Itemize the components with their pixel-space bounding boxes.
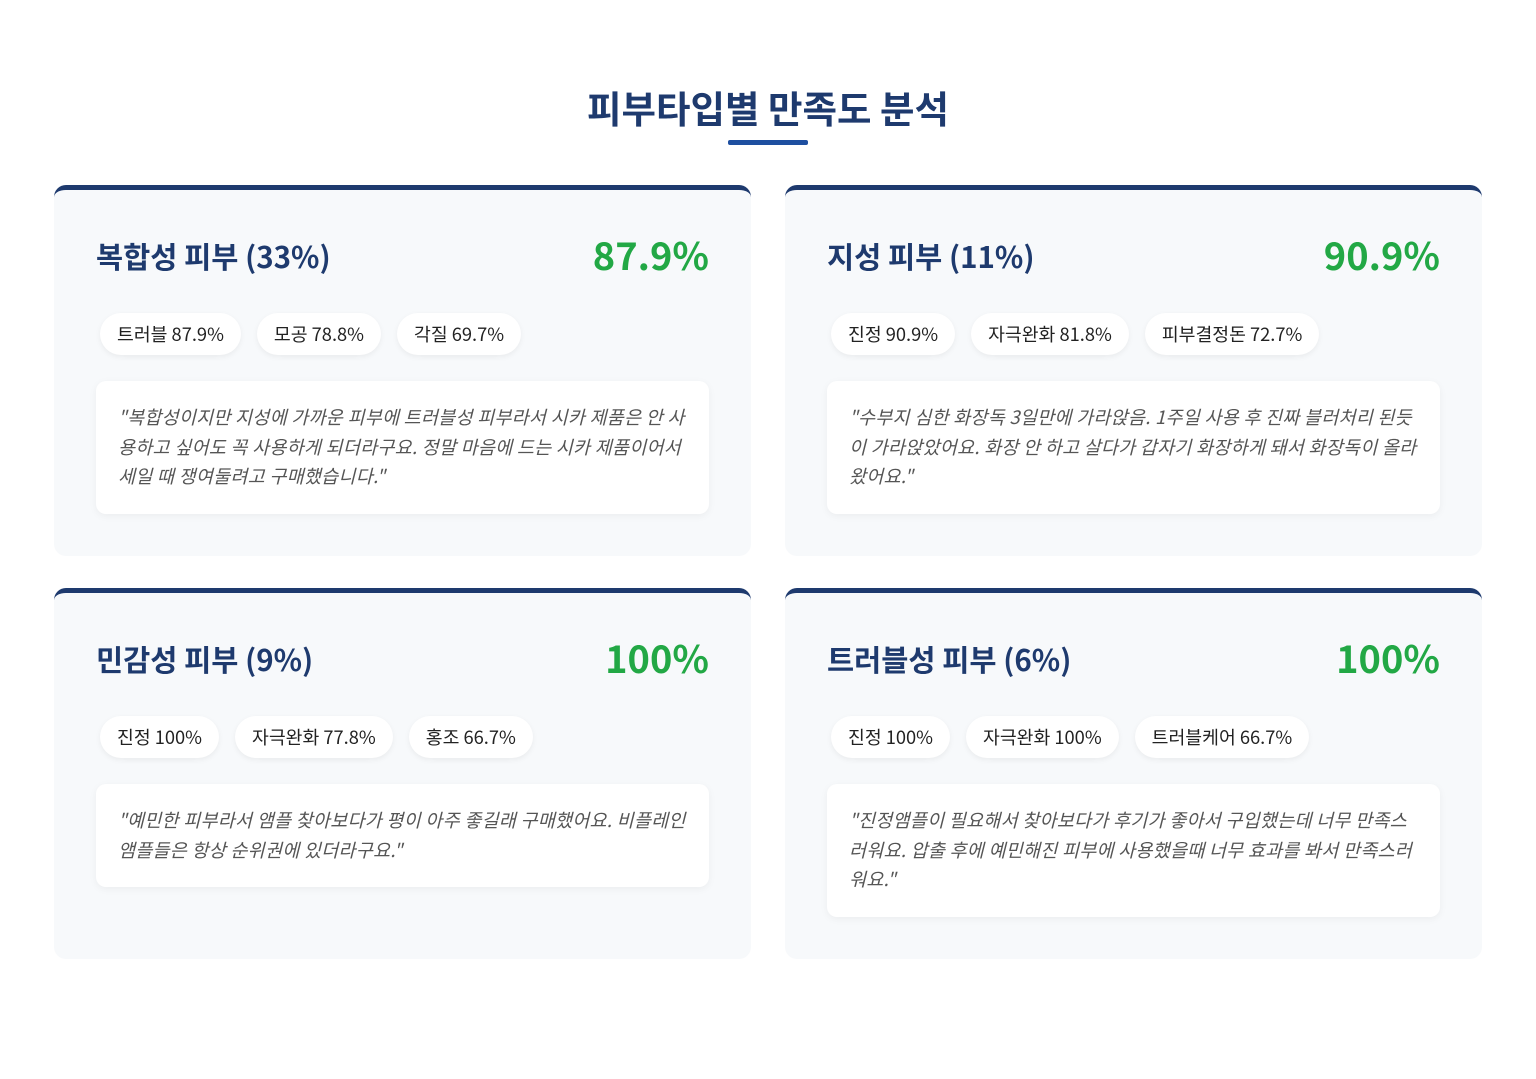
panel: trouble skin [785,588,1482,959]
panel: oily skin [785,185,1482,556]
tags: 자극완화 100% [983,724,1102,750]
tags: 각질 69.7% [414,321,504,347]
tags: 트러블케어 66.7% [1152,724,1292,750]
tags [836,321,1314,356]
quote: "예민한 피부라서 앰플 찾아보다가 평이 아주 좋길래 구매했어요. 비플레인 앰플들은 항상 순위권에 있더라구요." [118,807,686,862]
quote [827,784,1440,916]
heading: 민감성 피부 (9%) [96,638,313,680]
tags: 트러블 87.9% [117,321,224,347]
percentage: 90.9% [1324,226,1440,281]
quote [96,784,709,887]
panel: sensitive skin [54,588,751,959]
heading: 복합성 피부 (33%) [96,235,331,277]
quote: "수부지 심한 화장독 3일만에 가라앉음. 1주일 사용 후 진짜 블러처리 된듯이 가라앉았어요. 화장 안 하고 살다가 갑자기 화장하게 돼서 화장독이 올라왔어요." [849,404,1416,489]
tags: 피부결정돈 72.7% [1162,321,1302,347]
percentage: 87.9% [593,226,709,281]
tags: 진정 90.9% [848,321,938,347]
tags: 진정 100% [117,724,202,750]
title: 피부타입별 만족도 분석 [587,79,949,134]
tags: 진정 100% [848,724,933,750]
percentage: 100% [605,629,709,684]
tags [105,724,528,760]
tags: 모공 78.8% [274,321,364,347]
percentage: 100% [1336,629,1440,684]
tags [836,724,1304,760]
tags [105,321,516,356]
panel: combination skin [54,185,751,556]
tags: 자극완화 77.8% [252,724,376,750]
quote [96,381,709,514]
heading: 지성 피부 (11%) [827,235,1034,277]
tags: 홍조 66.7% [426,724,516,750]
quote: "진정앰플이 필요해서 찾아보다가 후기가 좋아서 구입했는데 너무 만족스러워요. 압출 후에 예민해진 피부에 사용했을때 너무 효과를 봐서 만족스러워요." [849,807,1412,892]
tags: 자극완화 81.8% [988,321,1112,347]
quote [827,381,1440,514]
quote: "복합성이지만 지성에 가까운 피부에 트러블성 피부라서 시카 제품은 안 사용하고 싶어도 꼭 사용하게 되더라구요. 정말 마음에 드는 시카 제품이어서 세일 때 쟁여둘려고 구매했습니다." [118,404,685,489]
heading: 트러블성 피부 (6%) [827,638,1071,680]
